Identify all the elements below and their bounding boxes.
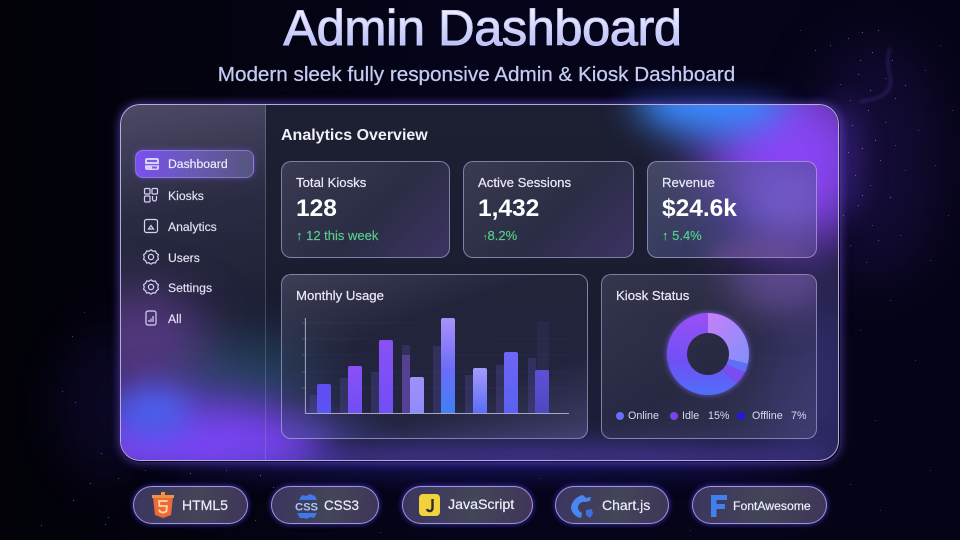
icon: css3: CSS — [295, 502, 318, 514]
icon: html5 shield — [152, 492, 174, 518]
badge: Chart.js — [555, 486, 669, 524]
nav item: Kiosks: Kiosks — [168, 189, 204, 203]
card: Revenue: Revenue — [662, 175, 715, 190]
delta: ↑8.2% — [483, 228, 517, 243]
nav item: Settings: Settings — [168, 281, 212, 295]
nav item: Analytics: Analytics — [168, 220, 217, 234]
nav item: Users — [143, 249, 200, 265]
icon: font F — [711, 495, 727, 517]
panel: dashboard window — [120, 104, 839, 461]
donut segment: idle — [722, 359, 748, 384]
delta: ↑ 5.4% — [662, 228, 702, 243]
card: Active Sessions: Active Sessions — [478, 175, 571, 190]
badge: JavaScript — [402, 486, 533, 524]
title: Admin Dashboard — [283, 0, 682, 56]
card: Total Kiosks — [281, 161, 450, 258]
legend: Idle: 15% — [708, 410, 729, 422]
nav item: All: All — [168, 312, 182, 326]
card: Kiosk Status: Kiosk Status — [616, 288, 689, 303]
icon: css3 — [295, 494, 318, 519]
nav item: Analytics — [144, 218, 217, 234]
badge: CSS3 — [271, 486, 379, 524]
card: Active Sessions: 1,432 — [478, 195, 539, 222]
card: Monthly Usage — [281, 274, 588, 439]
heading: Analytics Overview: Analytics Overview — [281, 127, 428, 144]
legend: Idle: Idle — [682, 410, 699, 422]
nav item: Dashboard active — [135, 150, 254, 178]
card: Monthly Usage: Monthly Usage — [296, 288, 384, 303]
badge: FontAwesome — [692, 486, 827, 524]
nav item: Users: Users — [168, 251, 200, 265]
donut segment: highlight — [708, 313, 749, 364]
title — [0, 0, 960, 59]
legend: Offline — [737, 410, 806, 422]
subtitle: Modern sleek fully responsive Admin & Kiosk Dashboard — [218, 63, 735, 86]
card: Revenue — [647, 161, 817, 258]
donut segment: online — [667, 313, 736, 395]
badge: HTML5 — [133, 486, 248, 524]
delta: ↑ 12 this week — [296, 228, 378, 243]
badge: FontAwesome: FontAwesome — [733, 499, 811, 513]
card: Kiosk Status — [601, 274, 817, 439]
legend: Offline: Offline — [752, 410, 783, 422]
nav item: Dashboard active: Dashboard — [168, 157, 228, 171]
card: Active Sessions — [463, 161, 634, 258]
card: Total Kiosks: Total Kiosks — [296, 175, 366, 190]
badge: HTML5: HTML5 — [182, 497, 228, 513]
icon: javascript — [419, 494, 440, 516]
legend: Online: Online — [628, 410, 659, 422]
card: Revenue: $24.6k — [662, 195, 737, 222]
donut chart — [663, 309, 753, 399]
card: Total Kiosks: 128 — [296, 195, 337, 222]
badge: JavaScript: JavaScript — [448, 497, 514, 513]
bar chart — [302, 318, 569, 414]
legend: Offline: 7% — [791, 410, 806, 422]
icon: chart.js — [571, 495, 593, 518]
badge: Chart.js: Chart.js — [602, 497, 650, 513]
nav item: Kiosks — [144, 188, 204, 203]
panel: sidebar — [121, 105, 266, 460]
badge: CSS3: CSS3 — [324, 498, 359, 513]
legend: Idle — [670, 410, 729, 422]
nav item: All — [145, 310, 182, 326]
nav item: Settings — [143, 279, 212, 295]
